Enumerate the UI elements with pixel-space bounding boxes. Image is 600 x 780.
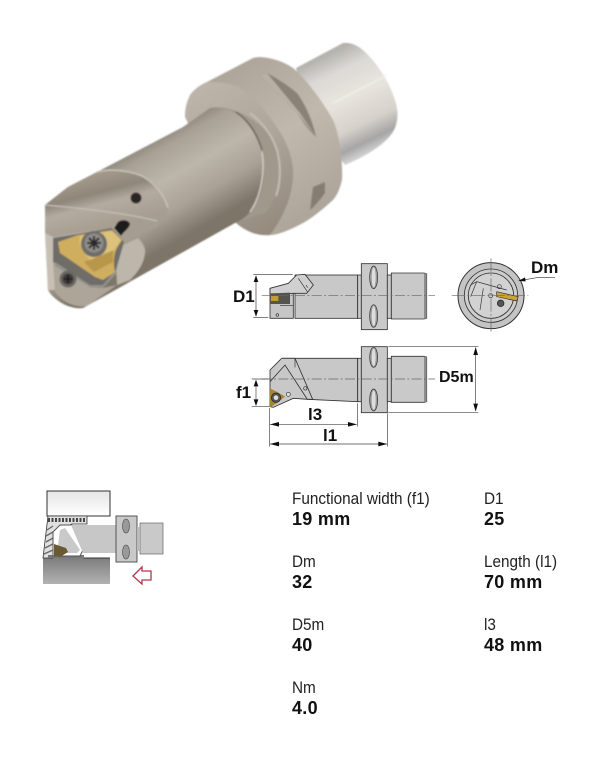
- spec: D5m: D5m: [292, 615, 324, 634]
- flange front face: [185, 82, 293, 235]
- spec: D5m: 40: [292, 635, 313, 655]
- spec: Dm: 32: [292, 572, 313, 592]
- spec: D1: D1: [484, 489, 504, 508]
- spec: Nm: Nm: [292, 678, 316, 697]
- flange outer band: [207, 57, 342, 235]
- rear shank: [391, 356, 427, 402]
- dimension labels: D1: [233, 287, 255, 306]
- spec: l3: [484, 615, 543, 655]
- product photo: threading tool holder: [45, 43, 397, 308]
- gold threading insert: [58, 230, 122, 280]
- left nose strip: [45, 233, 55, 290]
- spec: length: 70 mm: [484, 572, 543, 592]
- collar lower cutout: [310, 182, 325, 210]
- technical drawing: end view: [452, 258, 555, 333]
- spec: length: Length (l1): [484, 552, 557, 571]
- insert seat: [53, 228, 124, 288]
- neck dark edge: [236, 112, 262, 150]
- body outline and shading: [295, 275, 358, 318]
- collar: [358, 358, 361, 402]
- rear cylindrical shank: [296, 43, 397, 165]
- dimension D1: [253, 275, 293, 317]
- chip pocket: [114, 220, 130, 236]
- spec: functional width: Functional width (f1): [292, 489, 430, 508]
- dimension labels: l1: [323, 426, 337, 445]
- rear shank: [391, 273, 427, 319]
- spec: D1: 25: [484, 509, 505, 529]
- boring bar head: [53, 525, 83, 556]
- neck recess: [210, 107, 280, 222]
- spec: Nm: 4.0: [292, 698, 318, 718]
- spec: functional width: 19 mm: [292, 509, 351, 529]
- lower head shading: [53, 262, 117, 306]
- collar: [358, 275, 361, 318]
- dimension labels: D5m: [439, 369, 474, 386]
- bottom thread strip: [48, 555, 84, 558]
- technical drawing: plan view: [252, 346, 478, 447]
- spec: length: [484, 552, 557, 592]
- workpiece upper part: [47, 491, 110, 516]
- screw hole: [130, 192, 142, 204]
- feed direction arrow: [133, 567, 151, 584]
- gold insert: [270, 388, 285, 407]
- collar groove: [260, 73, 316, 137]
- dimension labels: Dm: [531, 258, 558, 277]
- shank neck: [137, 527, 140, 551]
- threaded bore wall: [43, 516, 87, 558]
- dimension labels: l3: [308, 405, 322, 424]
- spec: D1: [484, 489, 505, 529]
- insert: [54, 544, 68, 557]
- application diagram: internal threading: [43, 491, 163, 584]
- body outline: [270, 358, 358, 407]
- spec: l3: l3: [484, 615, 496, 634]
- dimension lines: [252, 346, 478, 447]
- spec: Dm: [292, 552, 316, 592]
- shank: [140, 523, 163, 554]
- spec: Dm: Dm: [292, 552, 316, 571]
- centre line: [262, 378, 435, 380]
- lower torx screw: [60, 270, 76, 288]
- insert clamp screw: [81, 231, 107, 257]
- spec: Nm: [292, 678, 318, 718]
- spec: l3: 48 mm: [484, 635, 543, 655]
- dimension labels: [233, 258, 558, 445]
- centre line: [262, 295, 435, 297]
- clearance line: [84, 557, 110, 559]
- spec: D5m: [292, 615, 324, 655]
- nose lobe beside insert: [116, 238, 145, 285]
- angled flat face: [45, 170, 168, 245]
- workpiece lower part: [43, 558, 110, 584]
- collar: [116, 516, 137, 562]
- boring bar: [71, 525, 117, 553]
- spec: functional width: [292, 489, 430, 529]
- dimension labels: f1: [236, 383, 251, 402]
- technical drawing: side view: [253, 264, 435, 330]
- tool body: [45, 108, 264, 308]
